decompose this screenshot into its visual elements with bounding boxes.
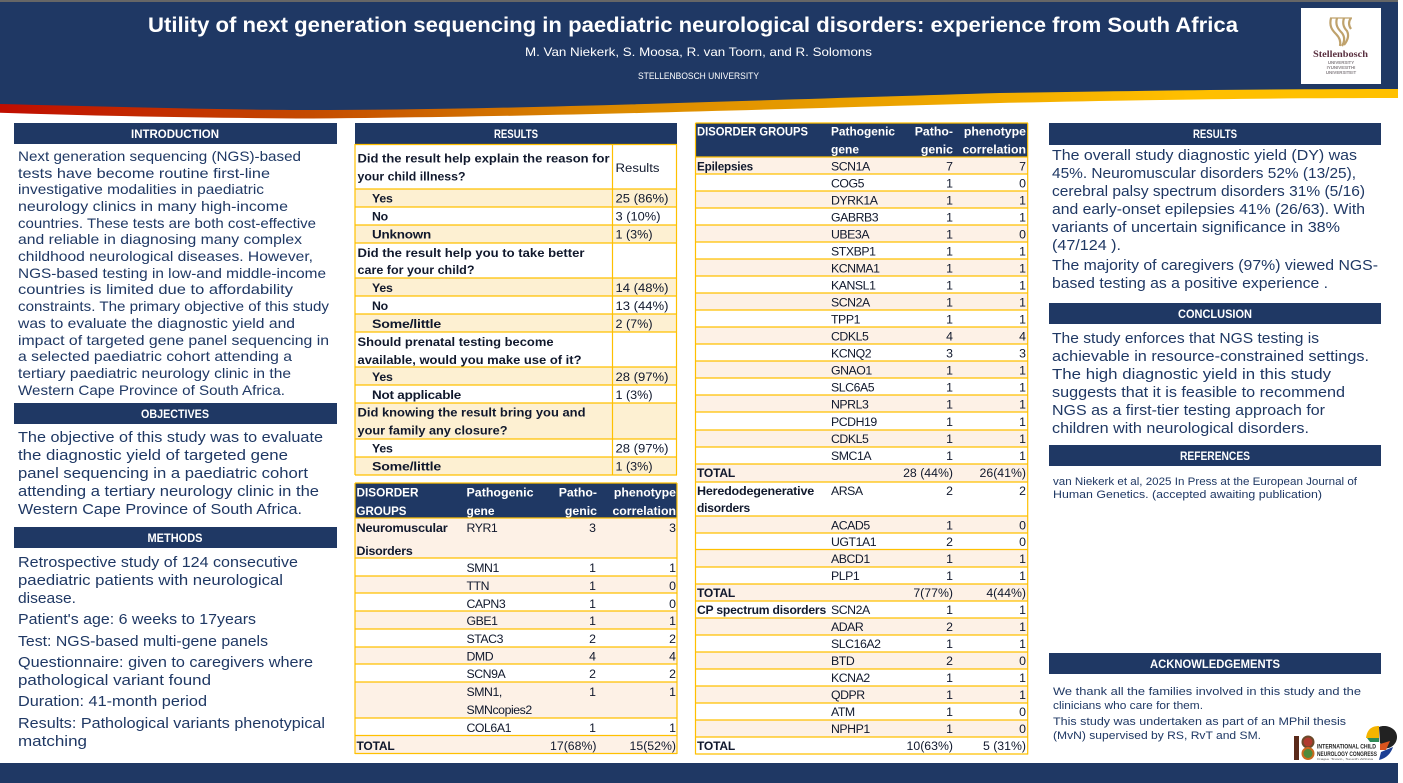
question 1: 25 (86%) bbox=[616, 192, 668, 206]
table header: genic bbox=[921, 142, 953, 156]
panel: references bbox=[1049, 445, 1381, 501]
CP spectrum rows: 0 bbox=[1019, 654, 1026, 668]
table rows: 1 bbox=[589, 685, 596, 699]
table header: gene bbox=[466, 504, 495, 518]
CP spectrum rows: KCNA2 bbox=[831, 671, 870, 685]
epilepsies rows: 1 bbox=[1019, 415, 1026, 429]
epilepsies rows: 1 bbox=[1019, 449, 1026, 463]
title: Utility of next generation sequencing in paediatric neurological disorders: experience from South Africa bbox=[148, 14, 1238, 37]
table rows: STAC3 bbox=[466, 632, 504, 646]
text block: objectives: attending a tertiary neurology clinic in the bbox=[18, 484, 319, 500]
text block: methods: disease. bbox=[18, 591, 76, 607]
text block: introduction: Western Cape Province of South Africa. bbox=[18, 382, 285, 398]
heredodegenerative rows: disorders bbox=[697, 501, 750, 515]
text block: conclusion: The high diagnostic yield in this study bbox=[1052, 367, 1332, 383]
text block: references: van Niekerk et al, 2025 In Press at the European Journal of bbox=[1053, 476, 1358, 488]
CP spectrum rows: 2 bbox=[946, 654, 953, 668]
epilepsies rows: 1 bbox=[1019, 244, 1026, 258]
text block: results summary bbox=[1052, 148, 1378, 292]
logo: International Child Neurology Congress bbox=[1294, 726, 1397, 761]
CP spectrum rows: ATM bbox=[831, 705, 855, 719]
text block: introduction: Next generation sequencing (NGS)-based bbox=[18, 148, 301, 164]
CP spectrum rows: 0 bbox=[1019, 705, 1026, 719]
heading: objectives bbox=[14, 403, 337, 424]
heredodegenerative rows: ARSA bbox=[831, 484, 864, 498]
question 4: Yes bbox=[372, 442, 393, 456]
CP spectrum rows: ADAR bbox=[831, 620, 864, 634]
CP spectrum rows: SLC16A2 bbox=[831, 637, 881, 651]
logo: Stellenbosch University: Stellenbosch bbox=[1313, 50, 1369, 60]
table rows: 4 bbox=[669, 650, 676, 664]
heredodegenerative rows: ABCD1 bbox=[831, 552, 870, 566]
logo: International Child Neurology Congress: NEUROLOGY CONGRESS bbox=[1317, 751, 1377, 758]
question 1: Results bbox=[616, 161, 660, 175]
epilepsies rows: 1 bbox=[946, 278, 953, 292]
question 2: Yes bbox=[372, 281, 393, 295]
question 2: No bbox=[372, 299, 389, 313]
question 1: 3 (10%) bbox=[616, 210, 660, 224]
text block: methods: Test: NGS-based multi-gene panels bbox=[18, 634, 268, 650]
table rows: 2 bbox=[669, 667, 676, 681]
question 4: Did knowing the result bring you and bbox=[358, 406, 586, 420]
epilepsies rows: SCN2A bbox=[831, 296, 871, 310]
question 2: 2 (7%) bbox=[616, 317, 652, 331]
epilepsies rows: CDKL5 bbox=[831, 432, 869, 446]
question 4: your family any closure? bbox=[358, 424, 508, 438]
epilepsies rows: STXBP1 bbox=[831, 244, 876, 258]
text block: introduction: countries is limited due to affordability bbox=[18, 281, 293, 297]
text block: introduction: was to evaluate the diagnostic yield and bbox=[17, 315, 295, 331]
epilepsies rows: 0 bbox=[1019, 176, 1026, 190]
epilepsies rows: 1 bbox=[946, 244, 953, 258]
table rows: 1 bbox=[669, 721, 676, 735]
epilepsies rows: 26(41%) bbox=[980, 466, 1026, 480]
table rows: 1 bbox=[589, 561, 596, 575]
text block: introduction: tests have become routine first-line bbox=[18, 165, 270, 181]
epilepsies rows: DYRK1A bbox=[831, 194, 879, 208]
question 4 bbox=[358, 406, 668, 474]
panel: acknowledgements bbox=[1049, 653, 1381, 742]
CP spectrum rows: NPHP1 bbox=[831, 722, 870, 736]
epilepsies rows: 1 bbox=[1019, 296, 1026, 310]
epilepsies rows: KCNMA1 bbox=[831, 262, 880, 276]
text block: objectives: Western Cape Province of South Africa. bbox=[18, 502, 302, 518]
text block: acknowledgements: (MvN) supervised by RS, RvT and SM. bbox=[1053, 730, 1261, 742]
CP spectrum rows: 1 bbox=[1019, 671, 1026, 685]
epilepsies rows: COG5 bbox=[831, 176, 865, 190]
text block: methods: Questionnaire: given to caregivers where bbox=[18, 655, 313, 671]
epilepsies rows: 1 bbox=[946, 176, 953, 190]
question 3: Yes bbox=[372, 370, 393, 384]
epilepsies rows: 1 bbox=[946, 210, 953, 224]
table header: phenotype bbox=[964, 124, 1026, 138]
text block: objectives bbox=[18, 430, 323, 518]
logo: International Child Neurology Congress: INTERNATIONAL CHILD bbox=[1317, 744, 1376, 750]
epilepsies rows: 1 bbox=[1019, 210, 1026, 224]
table rows: COL6A1 bbox=[466, 721, 512, 735]
table total: 15(52%) bbox=[630, 739, 676, 753]
epilepsies rows: 1 bbox=[1019, 380, 1026, 394]
epilepsies rows: 1 bbox=[946, 364, 953, 378]
epilepsies rows: 1 bbox=[1019, 278, 1026, 292]
text block: acknowledgements bbox=[1053, 686, 1361, 742]
logo: International Child Neurology Congress: Cape Town, South Africa bbox=[1317, 757, 1374, 761]
table rows: 3 bbox=[669, 521, 676, 535]
text block: results summary: cerebral palsy spectrum disorders 31% (5/16) bbox=[1052, 184, 1365, 200]
table rows: 1 bbox=[669, 614, 676, 628]
question 4: 28 (97%) bbox=[616, 442, 668, 456]
heading: results (questionnaire) bbox=[355, 123, 677, 144]
text block: introduction: countries. These tests are both cost-effective bbox=[18, 215, 316, 231]
text block: methods: Results: Pathological variants phenotypical bbox=[18, 716, 325, 732]
table rows: 1 bbox=[589, 614, 596, 628]
table rows: Disorders bbox=[356, 544, 413, 558]
table header: genic bbox=[565, 504, 597, 518]
epilepsies rows: 3 bbox=[946, 346, 953, 360]
question 2 bbox=[358, 246, 668, 331]
question 1: Yes bbox=[372, 192, 393, 206]
table: caregiver questionnaire results bbox=[355, 144, 677, 475]
epilepsies rows: 7 bbox=[1019, 160, 1026, 174]
CP spectrum rows: 2 bbox=[946, 620, 953, 634]
table header: DISORDER GROUPS bbox=[697, 124, 808, 138]
panel: methods bbox=[14, 527, 337, 750]
table rows: SMNcopies2 bbox=[466, 703, 532, 717]
epilepsies rows: 1 bbox=[946, 415, 953, 429]
CP spectrum rows: 1 bbox=[946, 603, 953, 617]
panel: introduction bbox=[14, 123, 337, 398]
epilepsies rows: PCDH19 bbox=[831, 415, 877, 429]
heredodegenerative rows: 1 bbox=[946, 552, 953, 566]
text block: conclusion: children with neurological disorders. bbox=[1052, 421, 1309, 437]
CP spectrum rows bbox=[697, 603, 1026, 753]
question 2: Some/little bbox=[372, 317, 441, 331]
question 1 bbox=[358, 152, 668, 242]
text block: results summary: The overall study diagnostic yield (DY) was bbox=[1052, 148, 1357, 164]
heredodegenerative rows: 1 bbox=[1019, 569, 1026, 583]
heading: results (questionnaire): RESULTS bbox=[494, 129, 538, 141]
panel: conclusion bbox=[1049, 303, 1381, 437]
question 3 bbox=[358, 335, 668, 402]
text block: methods bbox=[18, 555, 325, 750]
epilepsies rows: KANSL1 bbox=[831, 278, 876, 292]
table rows: 2 bbox=[669, 632, 676, 646]
table rows: RYR1 bbox=[466, 521, 498, 535]
text block: methods: matching bbox=[18, 734, 87, 750]
table rows: SMN1 bbox=[466, 561, 499, 575]
logo: Stellenbosch University bbox=[1301, 8, 1381, 84]
epilepsies rows: 7 bbox=[946, 160, 953, 174]
CP spectrum rows: BTD bbox=[831, 654, 855, 668]
text block: references bbox=[1053, 476, 1358, 501]
CP spectrum rows: 1 bbox=[946, 722, 953, 736]
text block: results summary: The majority of caregivers (97%) viewed NGS- bbox=[1052, 258, 1378, 274]
text block: conclusion bbox=[1052, 331, 1369, 437]
epilepsies rows: 1 bbox=[946, 449, 953, 463]
epilepsies rows: 1 bbox=[946, 194, 953, 208]
heading: introduction: INTRODUCTION bbox=[131, 129, 219, 141]
epilepsies rows: 3 bbox=[1019, 346, 1026, 360]
question 4: Some/little bbox=[372, 460, 441, 474]
affiliation: STELLENBOSCH UNIVERSITY bbox=[638, 71, 760, 82]
epilepsies rows: 1 bbox=[1019, 312, 1026, 326]
CP spectrum rows: 1 bbox=[1019, 688, 1026, 702]
CP spectrum rows: QDPR bbox=[831, 688, 865, 702]
heredodegenerative rows: 2 bbox=[946, 484, 953, 498]
text block: introduction: a selected paediatric cohort attending a bbox=[18, 348, 292, 364]
text block: methods: paediatric patients with neurological bbox=[18, 573, 283, 589]
epilepsies rows: CDKL5 bbox=[831, 330, 869, 344]
epilepsies rows: 1 bbox=[946, 228, 953, 242]
table total bbox=[356, 739, 676, 753]
epilepsies rows: SCN1A bbox=[831, 160, 871, 174]
CP spectrum rows: CP spectrum disorders bbox=[697, 603, 826, 617]
epilepsies rows: 1 bbox=[946, 432, 953, 446]
epilepsies rows: 1 bbox=[946, 262, 953, 276]
text block: objectives: the diagnostic yield of targeted gene bbox=[18, 448, 288, 464]
heredodegenerative rows: 7(77%) bbox=[913, 586, 953, 600]
table rows: SMN1, bbox=[466, 685, 502, 699]
header swoosh bbox=[0, 89, 1398, 118]
text block: methods: pathological variant found bbox=[18, 673, 211, 689]
text block: introduction: childhood neurological diseases. However, bbox=[18, 248, 313, 264]
heading: methods: METHODS bbox=[148, 533, 203, 545]
CP spectrum rows: 1 bbox=[1019, 637, 1026, 651]
question 3: 1 (3%) bbox=[616, 388, 652, 402]
question 3: Should prenatal testing become bbox=[358, 335, 554, 349]
heading: results: RESULTS bbox=[1193, 129, 1237, 141]
text block: objectives: panel sequencing in a paediatric cohort bbox=[18, 466, 308, 482]
icon: gold emblem bbox=[1330, 18, 1352, 46]
heredodegenerative rows: Heredodegenerative bbox=[697, 484, 814, 498]
heading: objectives: OBJECTIVES bbox=[141, 409, 209, 421]
table rows: Neuromuscular bbox=[356, 521, 448, 535]
text block: results summary: (47/124 ). bbox=[1052, 238, 1121, 254]
question 2: 14 (48%) bbox=[616, 281, 668, 295]
text block: acknowledgements: This study was undertaken as part of an MPhil thesis bbox=[1053, 716, 1347, 728]
table total: TOTAL bbox=[356, 739, 395, 753]
CP spectrum rows: 5 (31%) bbox=[983, 739, 1026, 753]
epilepsies rows: Epilepsies bbox=[697, 160, 753, 174]
table rows: 1 bbox=[669, 561, 676, 575]
table header: GROUPS bbox=[356, 504, 406, 518]
epilepsies rows: 1 bbox=[1019, 262, 1026, 276]
text block: results summary: based testing as a positive experience . bbox=[1052, 276, 1328, 292]
heredodegenerative rows: 1 bbox=[946, 518, 953, 532]
text block: methods: Duration: 41-month period bbox=[18, 694, 207, 710]
footer bar bbox=[0, 763, 1398, 783]
question 3: 28 (97%) bbox=[616, 370, 668, 384]
heading: introduction bbox=[14, 123, 337, 144]
epilepsies rows bbox=[697, 160, 1026, 480]
text block: conclusion: The study enforces that NGS testing is bbox=[1052, 331, 1319, 347]
heading: conclusion: CONCLUSION bbox=[1178, 309, 1252, 321]
heading: references: REFERENCES bbox=[1180, 451, 1250, 463]
table header: correlation bbox=[612, 504, 676, 518]
table rows: CAPN3 bbox=[466, 597, 506, 611]
panel: objectives bbox=[14, 403, 337, 518]
heredodegenerative rows: UGT1A1 bbox=[831, 535, 877, 549]
table rows: 3 bbox=[589, 521, 596, 535]
epilepsies rows: 1 bbox=[946, 312, 953, 326]
epilepsies rows: 1 bbox=[1019, 194, 1026, 208]
table rows: GBE1 bbox=[466, 614, 498, 628]
question 1: 1 (3%) bbox=[616, 228, 652, 242]
heredodegenerative rows: 1 bbox=[946, 569, 953, 583]
epilepsies rows: 1 bbox=[946, 380, 953, 394]
table rows: 4 bbox=[589, 650, 596, 664]
heading: results bbox=[1049, 123, 1381, 145]
heading: acknowledgements: ACKNOWLEDGEMENTS bbox=[1150, 659, 1280, 671]
table rows: TTN bbox=[466, 579, 489, 593]
text block: introduction: and reliable in diagnosing many complex bbox=[18, 231, 302, 247]
table rows: 1 bbox=[589, 597, 596, 611]
table: neuromuscular disorders bbox=[355, 483, 677, 754]
CP spectrum rows: SCN2A bbox=[831, 603, 871, 617]
logo: Stellenbosch University: UNIVERSITEIT bbox=[1326, 70, 1356, 75]
table rows: DMD bbox=[466, 650, 494, 664]
table: epilepsies, heredodegenerative and CP spectrum disorders bbox=[696, 123, 1028, 754]
question 3: Not applicable bbox=[372, 388, 461, 402]
epilepsies rows: GABRB3 bbox=[831, 210, 879, 224]
text block: introduction: investigative modalities in paediatric bbox=[18, 181, 264, 197]
epilepsies rows: UBE3A bbox=[831, 228, 870, 242]
text block: methods: Retrospective study of 124 consecutive bbox=[18, 555, 298, 571]
heredodegenerative rows: 0 bbox=[1019, 535, 1026, 549]
CP spectrum rows: 1 bbox=[946, 688, 953, 702]
CP spectrum rows: 1 bbox=[1019, 603, 1026, 617]
text block: acknowledgements: We thank all the families involved in this study and the bbox=[1053, 686, 1361, 698]
heredodegenerative rows: ACAD5 bbox=[831, 518, 870, 532]
CP spectrum rows: 10(63%) bbox=[907, 739, 953, 753]
epilepsies rows: 1 bbox=[1019, 432, 1026, 446]
epilepsies rows: TPP1 bbox=[831, 312, 861, 326]
question 4: 1 (3%) bbox=[616, 460, 652, 474]
authors: M. Van Niekerk, S. Moosa, R. van Toorn, and R. Solomons bbox=[525, 45, 872, 59]
text block: methods: Patient's age: 6 weeks to 17years bbox=[18, 612, 256, 628]
heading: references bbox=[1049, 445, 1381, 466]
text block: introduction: constraints. The primary objective of this study bbox=[18, 298, 329, 314]
heredodegenerative rows bbox=[697, 484, 1026, 600]
table rows: 0 bbox=[669, 579, 676, 593]
CP spectrum rows: 1 bbox=[946, 705, 953, 719]
epilepsies rows: GNAO1 bbox=[831, 364, 872, 378]
epilepsies rows: SMC1A bbox=[831, 449, 872, 463]
text block: conclusion: NGS as a first-tier testing approach for bbox=[1052, 403, 1325, 419]
heading: acknowledgements bbox=[1049, 653, 1381, 674]
question 1: Unknown bbox=[372, 228, 431, 242]
table header: Pathogenic bbox=[831, 124, 895, 138]
panel: results summary bbox=[1049, 123, 1381, 292]
table header bbox=[697, 124, 1026, 156]
text block: introduction: neurology clinics in many high-income bbox=[18, 198, 288, 214]
epilepsies rows: 0 bbox=[1019, 228, 1026, 242]
logo: Stellenbosch University: UNIVERSITY bbox=[1328, 60, 1354, 65]
epilepsies rows: 1 bbox=[1019, 364, 1026, 378]
table total: 17(68%) bbox=[550, 739, 596, 753]
CP spectrum rows: 1 bbox=[946, 671, 953, 685]
question 2: Did the result help you to take better bbox=[358, 246, 585, 260]
heading: methods bbox=[14, 527, 337, 548]
heredodegenerative rows: TOTAL bbox=[697, 586, 736, 600]
heredodegenerative rows: 2 bbox=[1019, 484, 1026, 498]
heredodegenerative rows: 4(44%) bbox=[986, 586, 1026, 600]
question 2: 13 (44%) bbox=[616, 299, 668, 313]
table header: Patho- bbox=[915, 124, 953, 138]
epilepsies rows: SLC6A5 bbox=[831, 380, 875, 394]
table rows: 1 bbox=[589, 721, 596, 735]
question 1: Did the result help explain the reason for bbox=[358, 152, 610, 166]
text block: objectives: The objective of this study was to evaluate bbox=[18, 430, 323, 446]
question 3: available, would you make use of it? bbox=[358, 353, 582, 367]
table header: gene bbox=[831, 142, 859, 156]
text block: results summary: and early-onset epilepsies 41% (26/63). With bbox=[1052, 202, 1365, 218]
CP spectrum rows: 1 bbox=[946, 637, 953, 651]
table header: DISORDER bbox=[356, 486, 419, 500]
text block: conclusion: achievable in resource-constrained settings. bbox=[1052, 349, 1369, 365]
question 2: care for your child? bbox=[358, 263, 474, 277]
text block: introduction: tertiary paediatric neurology clinic in the bbox=[18, 365, 291, 381]
table header: Pathogenic bbox=[466, 486, 534, 500]
text block: results summary: variants of uncertain significance in 38% bbox=[1052, 220, 1340, 236]
text block: acknowledgements: clinicians who care for them. bbox=[1053, 700, 1203, 712]
logo: Stellenbosch University: IYUNIVESITHI bbox=[1327, 65, 1355, 70]
epilepsies rows: 1 bbox=[1019, 398, 1026, 412]
table header: Patho- bbox=[559, 486, 597, 500]
text block: results summary: 45%. Neuromuscular disorders 52% (13/25), bbox=[1052, 166, 1356, 182]
table rows: SCN9A bbox=[466, 667, 507, 681]
table rows bbox=[356, 521, 676, 735]
heredodegenerative rows: 1 bbox=[1019, 552, 1026, 566]
text block: conclusion: suggests that it is feasible to recommend bbox=[1052, 385, 1345, 401]
table header: phenotype bbox=[614, 486, 676, 500]
text block: introduction: impact of targeted gene panel sequencing in bbox=[18, 332, 329, 348]
epilepsies rows: KCNQ2 bbox=[831, 346, 872, 360]
CP spectrum rows: TOTAL bbox=[697, 739, 736, 753]
epilepsies rows: 4 bbox=[1019, 330, 1026, 344]
heading: conclusion bbox=[1049, 303, 1381, 324]
text block: references: Human Genetics. (accepted awaiting publication) bbox=[1053, 489, 1322, 501]
table header: correlation bbox=[962, 142, 1026, 156]
table rows: 1 bbox=[589, 579, 596, 593]
question 1: your child illness? bbox=[358, 170, 466, 184]
table rows: 2 bbox=[589, 632, 596, 646]
CP spectrum rows: 0 bbox=[1019, 722, 1026, 736]
CP spectrum rows: 1 bbox=[1019, 620, 1026, 634]
epilepsies rows: TOTAL bbox=[697, 466, 736, 480]
question 1: No bbox=[372, 210, 389, 224]
epilepsies rows: 1 bbox=[946, 296, 953, 310]
epilepsies rows: 4 bbox=[946, 330, 953, 344]
heredodegenerative rows: 2 bbox=[946, 535, 953, 549]
text block: introduction: NGS-based testing in low-and middle-income bbox=[18, 265, 326, 281]
heredodegenerative rows: PLP1 bbox=[831, 569, 860, 583]
text block: introduction bbox=[17, 148, 329, 398]
table rows: 2 bbox=[589, 667, 596, 681]
epilepsies rows: 1 bbox=[946, 398, 953, 412]
epilepsies rows: 28 (44%) bbox=[903, 466, 953, 480]
epilepsies rows: NPRL3 bbox=[831, 398, 869, 412]
table rows: 1 bbox=[669, 685, 676, 699]
header banner bbox=[0, 0, 1398, 118]
table rows: 0 bbox=[669, 597, 676, 611]
heredodegenerative rows: 0 bbox=[1019, 518, 1026, 532]
table header bbox=[356, 486, 676, 518]
